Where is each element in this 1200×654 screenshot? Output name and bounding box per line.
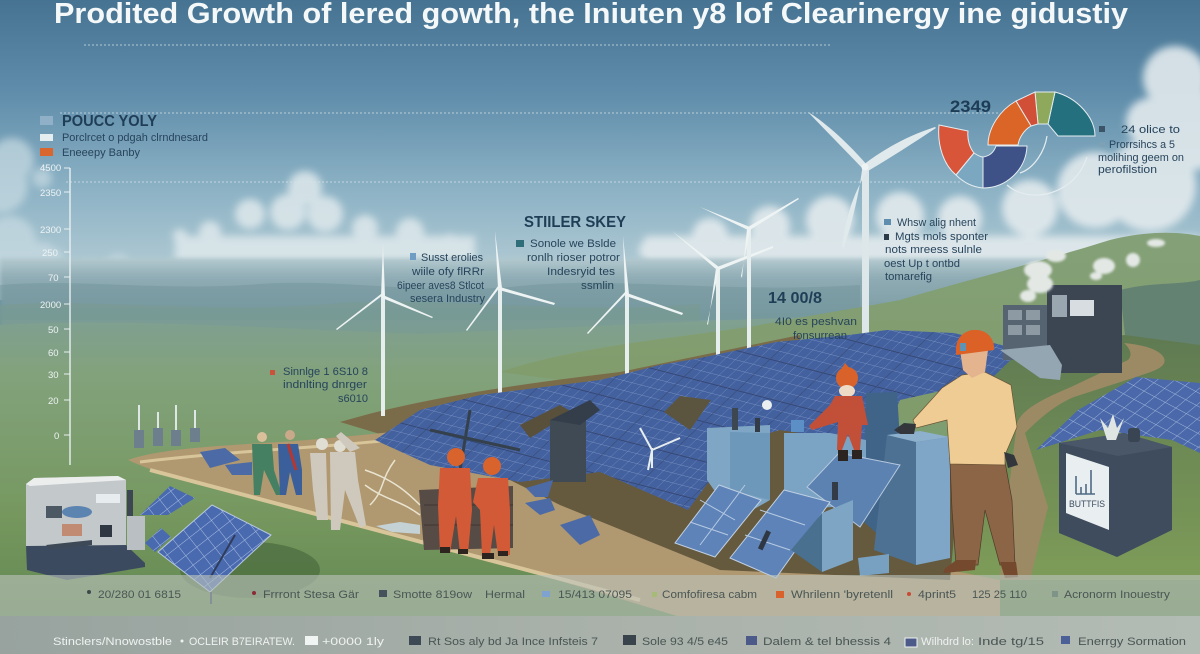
legend	[40, 113, 208, 159]
turbine 5	[700, 198, 799, 350]
bottom legend band 1: Whrilenn 'byretenll	[791, 589, 893, 601]
foreground ground right	[960, 335, 1200, 580]
callout lower left: s6010	[338, 393, 368, 405]
chart value: 2349	[950, 97, 991, 116]
dark info box with label	[1059, 414, 1172, 557]
callout centre: ssmlin	[581, 280, 614, 292]
bottom legend band 1: 20/280 01 6815	[98, 589, 181, 601]
solar panel field	[375, 330, 1021, 510]
turbine 4	[672, 231, 773, 368]
small turbine on panels	[640, 428, 680, 470]
axis with tick labels: 70	[48, 273, 59, 284]
callout centre: ronlh rioser potror	[527, 252, 620, 264]
axis with tick labels: 60	[48, 348, 59, 359]
callout lower left: Sinnlge 1 6S10 8	[283, 366, 368, 378]
turbine 3	[587, 236, 683, 390]
legend: Porclrcet o pdgah clrndnesard	[62, 132, 208, 144]
dirt path	[128, 335, 1165, 620]
axis with tick labels: 2000	[40, 300, 61, 311]
bottom legend band 1: Acronorm Inouestry	[1064, 589, 1171, 601]
blue equipment boxes	[675, 392, 950, 578]
axis with tick labels: 20	[48, 396, 59, 407]
tilted panel a	[675, 485, 761, 557]
callout right: Mgts mols sponter	[895, 231, 988, 243]
sky background	[0, 0, 1200, 300]
workers group	[252, 430, 420, 534]
legend: POUCC YOLY	[62, 113, 157, 130]
callout centre: Sonole we Bslde	[530, 238, 616, 250]
bottom legend band 2: Dalem & tel bhessis 4	[763, 636, 891, 648]
bottom legend band 2: OCLEIR B7EIRATEW.	[189, 636, 295, 648]
bottom legend band 2: Enerrgy Sormation	[1078, 636, 1186, 648]
red workers with crate	[419, 448, 513, 559]
callout lower left	[270, 366, 368, 405]
legend: Eneeepy Banby	[62, 147, 141, 159]
dotted guide lines	[60, 45, 1000, 182]
left console machine	[26, 476, 145, 580]
callout left: wiile ofy flRRr	[411, 266, 484, 278]
tilted panel c	[807, 453, 900, 527]
bottom legend band 1: 15/413 07095	[558, 589, 632, 601]
bottom legend band 2: Stinclers/Nnowostble	[53, 636, 172, 648]
tarp on ground	[376, 522, 420, 534]
bottom legend band 2: Sole 93 4/5 e45	[642, 636, 728, 648]
callout lower left: indnlting dnrger	[283, 379, 367, 391]
wires	[365, 460, 420, 515]
bottom legend band 1: Comfofiresa cabm	[662, 589, 757, 601]
scattered panels near workers	[200, 448, 600, 545]
callout figure: fonsurrean	[793, 330, 847, 342]
callout right: nots mreess sulnle	[885, 244, 982, 256]
bottom legend band 2	[0, 616, 1200, 654]
callout figure: 4I0 es peshvan	[775, 316, 857, 328]
head	[960, 350, 988, 378]
callout figure: 14 00/8	[768, 290, 822, 307]
right solar panels	[1036, 377, 1200, 453]
axis with tick labels: 50	[48, 325, 59, 336]
callout right: tomarefig	[885, 271, 932, 283]
small poles	[134, 405, 200, 448]
callout centre	[516, 238, 620, 292]
chart note: perofilstion	[1098, 164, 1157, 176]
turbine 2	[466, 231, 555, 400]
green worker	[252, 432, 282, 495]
bottom legend band 2: +0000 1ly	[322, 636, 385, 648]
box 1	[707, 400, 772, 520]
clouds	[0, 46, 1200, 284]
callout right	[884, 217, 988, 283]
gloves	[894, 423, 916, 434]
axis with tick labels: 250	[42, 248, 58, 259]
turbine 1	[336, 243, 433, 416]
big box	[874, 431, 950, 565]
wind turbines	[336, 112, 936, 416]
callout left: Susst erolies	[421, 252, 483, 264]
front box	[791, 482, 853, 572]
dark machine	[430, 400, 600, 482]
cup on box	[791, 420, 804, 432]
boots	[944, 560, 976, 573]
white workers	[310, 432, 366, 530]
small cube	[858, 554, 889, 576]
callout left: sesera Industry	[410, 293, 485, 305]
callout centre: Indesryid tes	[547, 266, 616, 278]
box 2	[784, 433, 866, 510]
donut chart	[939, 92, 1095, 195]
callout left: 6ipeer aves8 Stlcot	[397, 280, 484, 292]
steam	[1020, 239, 1165, 302]
bottom legend band 1: 125 25 110	[972, 589, 1027, 601]
axis with tick labels: 2300	[40, 225, 61, 236]
bottom legend band 1	[0, 575, 1200, 616]
turbine 6 large	[808, 112, 936, 338]
distant hills	[0, 258, 1200, 338]
bottom legend band 1: Hermal	[485, 589, 525, 601]
callout right: oest Up t ontbd	[884, 258, 960, 270]
man in tan shirt	[894, 330, 1018, 578]
trousers	[950, 462, 1015, 565]
axis with tick labels: 2350	[40, 188, 61, 199]
callout left	[397, 252, 485, 305]
bottom legend band 2: Rt Sos aly bd Ja Ince Infsteis 7	[428, 636, 598, 648]
bottom legend band 2: Inde tg/15	[978, 636, 1044, 648]
chart note: Prorrsihcs a 5	[1109, 139, 1175, 151]
axis with tick labels: 0	[54, 431, 59, 442]
child in red	[809, 363, 868, 461]
tall back box	[862, 392, 900, 540]
callout centre heading: STIILER SKEY	[524, 214, 626, 231]
chart note	[1098, 124, 1184, 176]
bottom legend band 1: Smotte 819ow	[393, 589, 472, 601]
bottom legend band 1: 4print5	[918, 589, 956, 601]
callout figure	[768, 290, 857, 342]
right hillside	[500, 233, 1200, 420]
callout right: Whsw alig nhent	[897, 217, 976, 229]
chart note: molihing geem on	[1098, 152, 1184, 164]
hard hat	[956, 330, 994, 355]
factory	[1000, 239, 1165, 380]
blue worker	[278, 430, 302, 495]
axis with tick labels: 30	[48, 370, 59, 381]
bottom legend band 2: Wilhdrd lo:	[921, 636, 974, 648]
tilted panel b	[730, 490, 830, 578]
meadow	[0, 304, 1200, 654]
axis with tick labels	[40, 163, 70, 465]
axis with tick labels: 4500	[40, 163, 61, 174]
lower left solar panels	[140, 486, 320, 604]
dark info box with label: BUTTFIS	[1069, 499, 1105, 509]
bottom legend band 1: Frrront Stesa Gär	[263, 589, 359, 601]
chart note: 24 olice to	[1121, 124, 1180, 136]
shirt	[913, 372, 1017, 465]
plant on box	[1100, 414, 1124, 440]
